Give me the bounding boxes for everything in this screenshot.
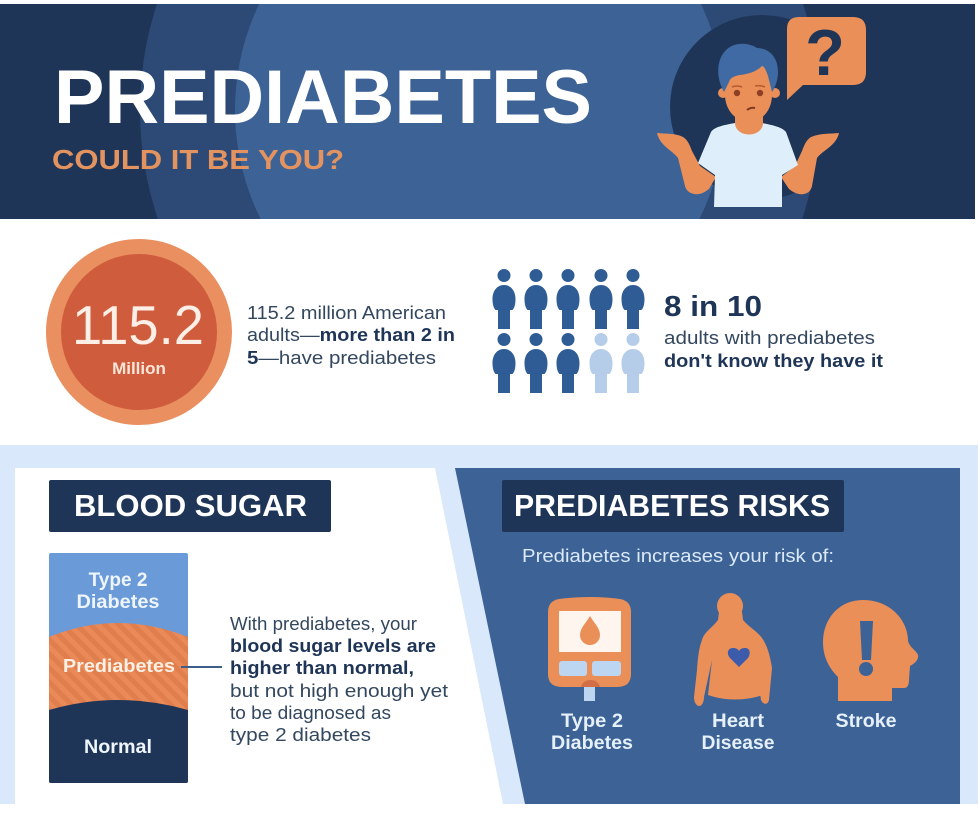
lower section background (0, 445, 978, 804)
header banner (0, 4, 975, 219)
subheading: Prediabetes increases your risk of: (522, 546, 834, 566)
icon: stroke head (823, 600, 918, 701)
text: blood sugar explanation: but not high enough yet (230, 680, 448, 701)
risk labels (551, 711, 896, 754)
speech bubble with question mark (787, 16, 866, 100)
icon: glucose meter (548, 597, 631, 701)
icon: heart disease (694, 593, 772, 706)
hair (718, 44, 778, 92)
stat circle: 115.2 million: 115.2 (72, 294, 204, 356)
heading: prediabetes risks (502, 480, 844, 532)
chart: blood sugar levels (49, 553, 188, 783)
chart: blood sugar levels: Prediabetes (63, 656, 175, 676)
stat circle: 115.2 million: Million (112, 359, 166, 378)
risk labels: Type 2 (561, 711, 623, 732)
stat text: adults with prediabetes: adults— more than 2 in (247, 324, 455, 345)
text: blood sugar explanation: higher than normal, (230, 657, 414, 678)
connector line (181, 666, 222, 668)
text: blood sugar explanation: type 2 diabetes (230, 724, 371, 745)
risk labels: Disease (702, 733, 774, 754)
chart: blood sugar levels: Normal (84, 737, 152, 758)
stat circle: 115.2 million (46, 239, 232, 425)
heading: blood sugar (49, 480, 331, 532)
stat text: 8 in 10 (664, 291, 883, 371)
shirt (698, 123, 798, 207)
pictogram: 8 in 10 people (492, 269, 644, 393)
text: blood sugar explanation: to be diagnosed as (230, 702, 391, 723)
panel: blood sugar (15, 468, 503, 804)
heading: blood sugar: BLOOD SUGAR (74, 488, 307, 523)
title: PREDIABETES (54, 55, 592, 140)
stat text: adults with prediabetes: 5—have prediabetes (247, 347, 436, 368)
risk labels: Stroke (836, 711, 896, 732)
neck (735, 116, 763, 134)
stat text: adults with prediabetes (247, 302, 455, 368)
speech bubble with question mark: ? (805, 16, 845, 89)
text: blood sugar explanation: With prediabetes, your (230, 613, 417, 634)
subtitle: COULD IT BE YOU? (52, 144, 344, 175)
text: blood sugar explanation (230, 613, 448, 745)
risk labels: Heart (712, 711, 765, 732)
heading: prediabetes risks: PREDIABETES RISKS (514, 488, 830, 523)
stat text: 8 in 10: adults with prediabetes (664, 328, 875, 348)
stat text: adults with prediabetes: 115.2 million American (247, 302, 446, 323)
risk labels: Diabetes (551, 733, 633, 754)
stat text: 8 in 10: don't know they have it (664, 351, 883, 371)
illustration: confused person (657, 16, 866, 207)
chart: blood sugar levels: Type 2 (89, 570, 147, 591)
arms (657, 133, 716, 194)
text: blood sugar explanation: blood sugar levels are (230, 635, 436, 656)
panel: prediabetes risks (455, 468, 960, 804)
chart: blood sugar levels: Diabetes (76, 592, 160, 613)
face (725, 66, 772, 117)
stat text: 8 in 10: 8 in 10 (664, 291, 762, 323)
